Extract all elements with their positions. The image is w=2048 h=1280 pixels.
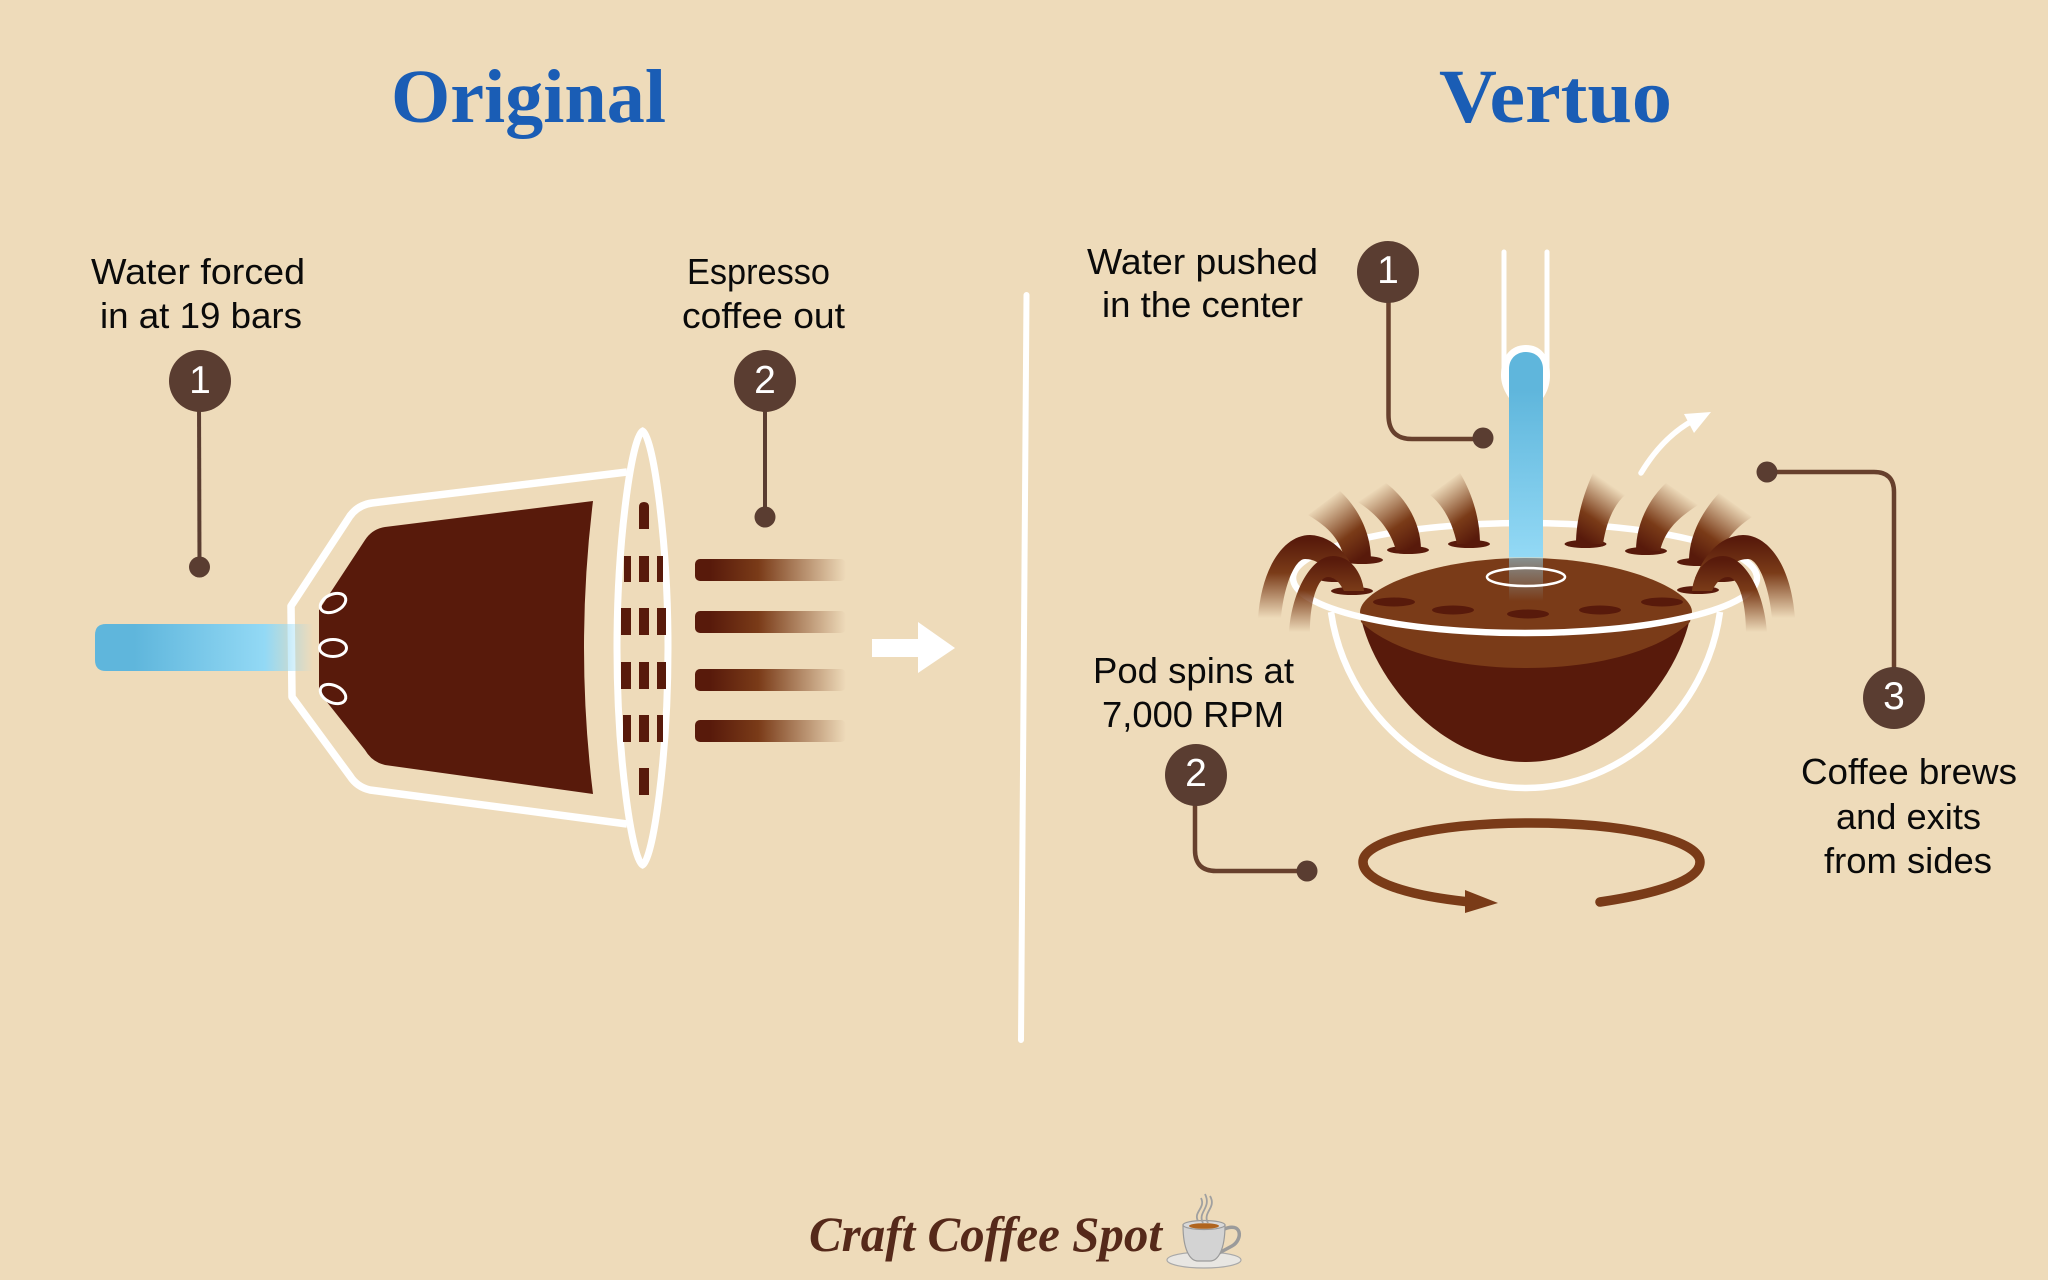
pod: outer cup outline (1331, 612, 1720, 788)
callout pin 2 (734, 350, 796, 528)
label: pod spins: Pod spins at (1093, 650, 1294, 691)
label: coffee brews (1801, 751, 2017, 881)
label: espresso coffee out: Espresso (687, 251, 830, 292)
label: water forced (91, 251, 305, 336)
label: espresso coffee out: coffee out (682, 295, 845, 336)
label: water pushed: Water pushed (1087, 241, 1318, 282)
label: coffee brews: from sides (1824, 840, 1992, 881)
title: Vertuo: Vertuo (1439, 55, 1672, 139)
label: pod spins (1093, 650, 1294, 735)
pod: inlet holes (317, 590, 349, 707)
title: Original: Original (391, 55, 666, 139)
injection ring (1487, 568, 1565, 586)
callout pin 3: 3 (1883, 675, 1905, 718)
coffee streams: right (1576, 473, 1795, 632)
label: espresso coffee out (682, 251, 845, 336)
coffee streams: left (1258, 473, 1480, 632)
callout pin 2 (1165, 744, 1318, 882)
pod: lid perforations (621, 502, 666, 795)
divider (1021, 295, 1026, 1040)
label: coffee brews: Coffee brews (1801, 751, 2017, 792)
label: water pushed (1087, 241, 1318, 325)
callout pin 2: 2 (1185, 752, 1207, 795)
pod: front lid (617, 431, 668, 865)
label: water forced: Water forced (91, 251, 305, 292)
footer: brand (809, 1194, 1241, 1268)
water stream (1509, 352, 1543, 601)
pod: rim (1293, 523, 1757, 633)
callout pin 1 (169, 350, 231, 578)
water inflow bar (95, 624, 313, 671)
nozzle: tube outline (1501, 252, 1550, 398)
arrow: rotation (1363, 823, 1700, 913)
pod: top holes (1317, 540, 1739, 618)
espresso outflow streams (695, 559, 846, 742)
panel: Original (91, 55, 955, 865)
label: water pushed: in the center (1102, 284, 1303, 325)
pod: coffee band (1360, 558, 1692, 668)
callout pin 3 (1756, 462, 1925, 729)
callout pin 1: 1 (1377, 249, 1399, 292)
arrow: flow direction (872, 622, 955, 673)
panel: Vertuo (1087, 55, 2017, 913)
icon: coffee cup (1167, 1194, 1241, 1268)
pod: capsule outline (291, 472, 627, 824)
label: coffee brews: and exits (1836, 796, 1981, 837)
pod: coffee grounds (319, 501, 593, 794)
callout pin 1 (1357, 241, 1494, 448)
pod: coffee bowl (1361, 618, 1690, 762)
arrow: coffee exit (1641, 412, 1711, 473)
brand name: Craft Coffee Spot (809, 1206, 1164, 1262)
label: pod spins: 7,000 RPM (1102, 694, 1284, 735)
label: water forced: in at 19 bars (100, 295, 302, 336)
callout pin 1: 1 (189, 359, 211, 402)
callout pin 2: 2 (754, 359, 776, 402)
